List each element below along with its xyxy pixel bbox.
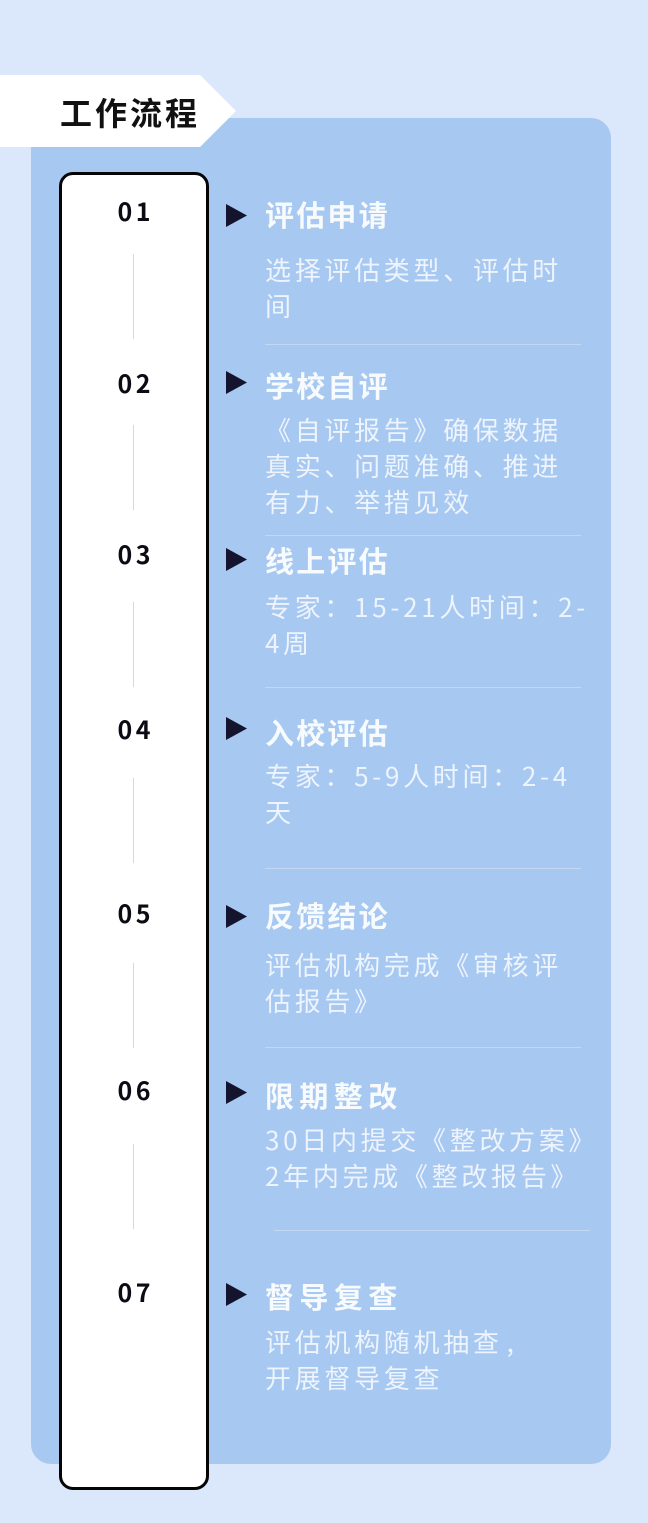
step 1 text <box>265 251 562 324</box>
step 6 heading: 限期整改 <box>265 1074 403 1116</box>
icon: arrow 2 <box>226 371 247 394</box>
step 1 text: 间 <box>265 287 295 324</box>
step 2 text: 有力、举措见效 <box>265 483 473 520</box>
step 7 text: 开展督导复查 <box>265 1359 443 1396</box>
step 4 text <box>265 757 571 830</box>
step number 03: 03 <box>117 536 154 572</box>
panel: blue background <box>31 118 611 1464</box>
step 7 text <box>265 1323 518 1396</box>
icon: arrow 5 <box>226 905 247 928</box>
step number 04: 04 <box>117 711 154 747</box>
step number 01: 01 <box>117 193 154 229</box>
step 2 text: 《自评报告》确保数据 <box>265 411 562 448</box>
step 5 heading: 反馈结论 <box>265 894 390 936</box>
icon: arrow 7 <box>226 1283 247 1306</box>
title banner: 工作流程 <box>60 89 200 135</box>
step number 02: 02 <box>117 365 154 401</box>
step 2 heading: 学校自评 <box>265 364 390 406</box>
icon: arrow 1 <box>226 204 247 227</box>
step 3 text: 专家：15-21人时间：2- <box>265 588 589 625</box>
step 6 text: 30日内提交《整改方案》 <box>265 1121 598 1158</box>
step 2 text: 真实、问题准确、推进 <box>265 447 562 484</box>
step 3 text <box>265 588 589 661</box>
icon: arrow 6 <box>226 1081 247 1104</box>
step number 05: 05 <box>117 895 154 931</box>
step 7 text: 评估机构随机抽查, <box>265 1323 518 1360</box>
step 4 heading: 入校评估 <box>265 711 390 753</box>
step 4 text: 天 <box>265 793 295 830</box>
step 5 text: 估报告》 <box>265 982 384 1019</box>
title banner <box>0 75 236 147</box>
step number 06: 06 <box>117 1072 154 1108</box>
step 7 heading: 督导复查 <box>265 1275 403 1317</box>
step 5 text <box>265 946 562 1019</box>
step 3 heading: 线上评估 <box>265 539 390 581</box>
icon: arrow 4 <box>226 717 247 740</box>
step number 07: 07 <box>117 1274 154 1310</box>
icon: arrow 3 <box>226 548 247 571</box>
step 2 text <box>265 411 562 520</box>
step 1 text: 选择评估类型、评估时 <box>265 251 562 288</box>
panel: number column <box>59 172 209 1490</box>
step 3 text: 4周 <box>265 624 313 661</box>
step 6 text <box>265 1121 598 1194</box>
step 1 heading: 评估申请 <box>265 193 390 235</box>
step 4 text: 专家：5-9人时间：2-4 <box>265 757 571 794</box>
step 5 text: 评估机构完成《审核评 <box>265 946 562 983</box>
step 6 text: 2年内完成《整改报告》 <box>265 1157 580 1194</box>
